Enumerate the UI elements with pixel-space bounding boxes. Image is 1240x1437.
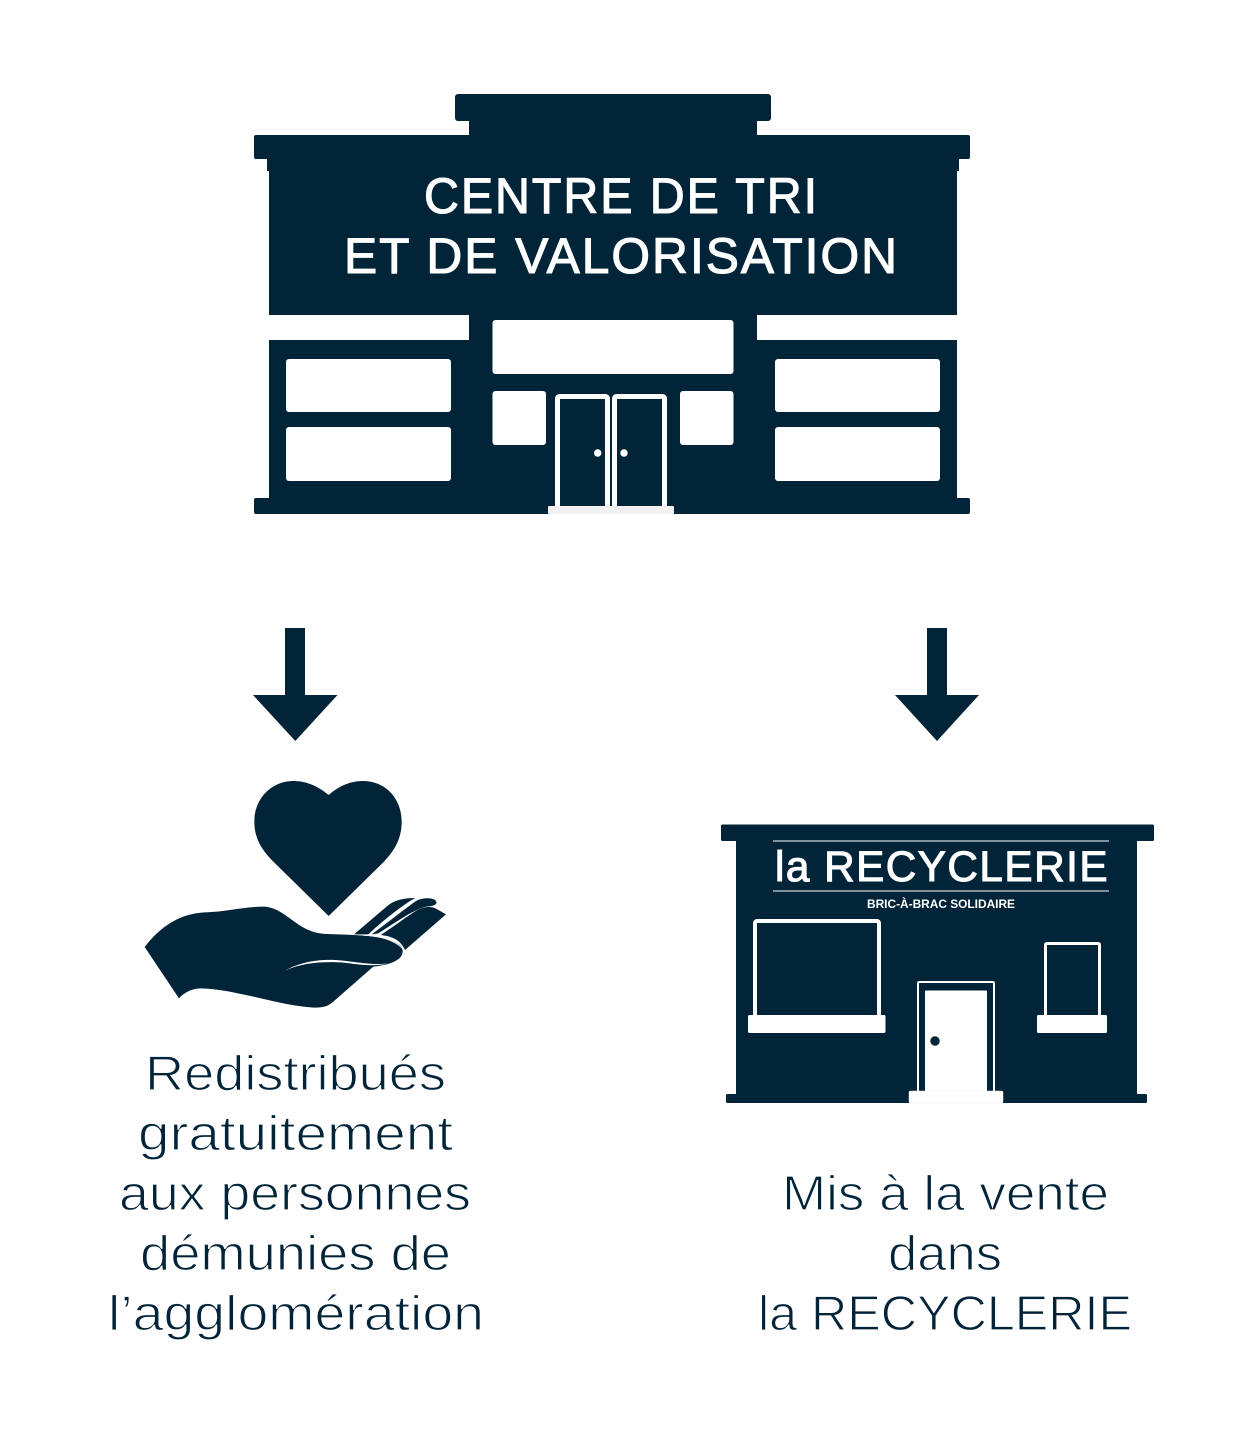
text: free redistribution: l’agglomération <box>108 1287 484 1341</box>
shop right window <box>1037 944 1107 1033</box>
icon: hand holding heart <box>145 781 446 1008</box>
shop sign: la RECYCLERIE <box>775 843 1109 891</box>
text: free redistribution: aux personnes <box>119 1167 471 1221</box>
arrow: right down <box>895 628 979 741</box>
text: sold in la Recyclerie: la RECYCLERIE <box>758 1287 1132 1341</box>
text: free redistribution: démunies de <box>140 1227 451 1281</box>
building title: ET DE VALORISATION <box>344 228 899 284</box>
shop sign <box>773 840 1109 911</box>
shop silhouette <box>721 824 1154 1103</box>
building title: CENTRE DE TRI <box>424 168 819 224</box>
icon: la Recyclerie shop <box>721 824 1154 1103</box>
text: sold in la Recyclerie <box>758 1167 1132 1341</box>
shop door <box>909 982 1003 1103</box>
arrow: left down <box>253 628 338 741</box>
building windows <box>286 320 940 481</box>
icon: sorting centre building <box>254 94 970 514</box>
shop left window <box>748 921 886 1033</box>
text: sold in la Recyclerie: Mis à la vente <box>782 1167 1109 1221</box>
text: sold in la Recyclerie: dans <box>888 1227 1002 1281</box>
text: free redistribution: Redistribués <box>145 1047 446 1101</box>
text: free redistribution: gratuitement <box>138 1107 453 1161</box>
building silhouette <box>254 94 970 514</box>
hand <box>145 898 446 1008</box>
building title <box>344 168 899 284</box>
shop sign: BRIC-À-BRAC SOLIDAIRE <box>867 898 1015 911</box>
heart <box>254 781 402 916</box>
building double door <box>548 396 674 514</box>
text: free redistribution <box>108 1047 484 1341</box>
